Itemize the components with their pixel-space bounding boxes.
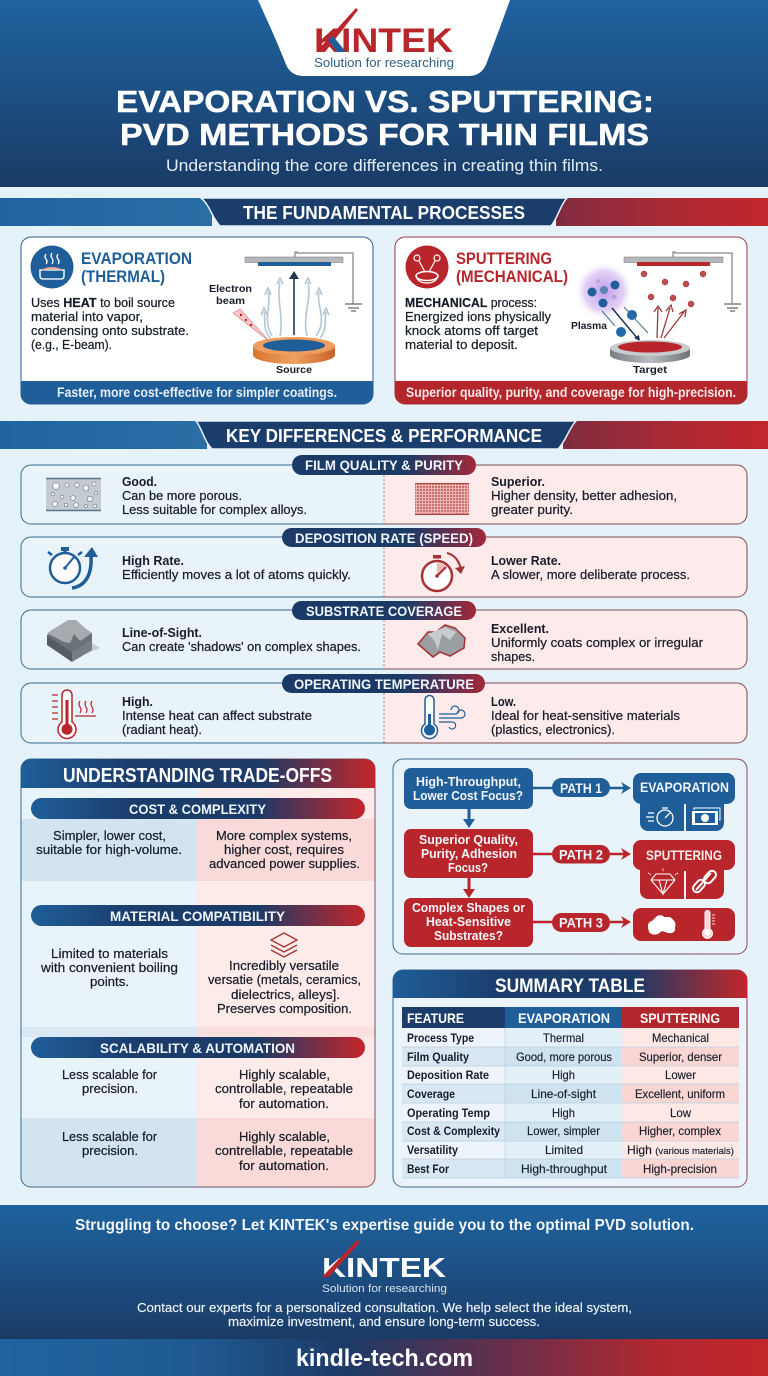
question: complex shapes: Complex Shapes or	[412, 901, 525, 915]
text: sputtering description: material to deposit.	[405, 337, 518, 352]
question: superior quality: Focus?	[448, 861, 488, 875]
text: sputtering scalability	[215, 1067, 353, 1111]
row: coverage: Coverage	[407, 1087, 455, 1101]
row: best for: High-throughput	[521, 1162, 608, 1176]
icon: thermometer	[702, 910, 715, 938]
row: versatility: Limited	[545, 1143, 583, 1157]
question: superior quality: Superior Quality,	[419, 833, 518, 847]
text: evaporation coverage	[122, 625, 361, 654]
row: operating temp: High	[552, 1106, 575, 1120]
section bar: the fundamental processes	[0, 198, 768, 226]
text: sputtering cost: More complex systems,	[216, 828, 352, 843]
text: evaporation materials	[40, 946, 178, 989]
text: sputtering film quality	[491, 474, 677, 517]
table	[402, 1007, 739, 1178]
title	[116, 84, 654, 152]
comparison row: deposition rate	[21, 528, 747, 597]
comparison row: operating temperature	[21, 674, 747, 743]
icon: dense film	[415, 483, 469, 515]
panel: summary table	[393, 970, 747, 1187]
icon: broken chain	[691, 869, 718, 894]
pill label: OPERATING TEMPERATURE	[294, 676, 474, 692]
section bar: key differences: KEY DIFFERENCES & PERFORMANCE	[226, 426, 542, 446]
text: sputtering materials: dielectrics, alleys].	[231, 987, 340, 1002]
row: process type: Mechanical	[652, 1031, 709, 1045]
row: best for: Best For	[407, 1162, 449, 1176]
sputtered atoms	[641, 271, 706, 307]
text: sputtering coverage: Uniformly coats complex or irregular	[491, 635, 704, 650]
row: coverage	[407, 1087, 725, 1101]
arrow: down to shapes	[463, 878, 475, 898]
pill label: SUBSTRATE COVERAGE	[306, 603, 462, 619]
callout: evaporation	[21, 381, 373, 404]
heading: sputtering	[456, 250, 568, 286]
text: sputtering coverage: shapes.	[491, 649, 535, 664]
icon: shadowed block	[47, 620, 100, 662]
row: film quality	[407, 1050, 722, 1064]
comparison row: film quality	[21, 455, 747, 524]
text: sputtering scalability: controllable, repeatable	[215, 1081, 353, 1096]
heading: summary table	[393, 970, 747, 998]
website bar	[0, 1339, 768, 1376]
text: sputtering coverage	[491, 621, 704, 664]
heading: sputtering: (MECHANICAL)	[456, 268, 568, 286]
text: evaporation cost	[36, 828, 182, 857]
heading: summary table: SUMMARY TABLE	[495, 976, 645, 997]
row: deposition rate: Lower	[665, 1068, 696, 1082]
text: evaporation scalability: Less scalable for	[62, 1067, 158, 1082]
row: process type: Thermal	[543, 1031, 584, 1045]
text: evaporation coverage: Can create 'shadows' on complex shapes.	[122, 639, 361, 654]
text: sputtering temperature	[491, 694, 680, 737]
text: evaporation description: Uses HEAT to boil source	[31, 295, 175, 310]
text: sputtering cost: advanced power supplies.	[209, 856, 360, 871]
text: sputtering film quality: greater purity.	[491, 502, 573, 517]
sub-heading: cost and complexity: COST & COMPLEXITY	[129, 801, 267, 817]
text: evaporation scalability repeat	[62, 1129, 158, 1158]
text: evaporation description	[31, 295, 189, 352]
row: deposition rate: Deposition Rate	[407, 1068, 489, 1082]
text: sputtering scalability repeat: Highly scalable,	[239, 1129, 330, 1144]
text: evaporation materials: Limited to materials	[51, 946, 169, 961]
text: sputtering description: knock atoms off target	[405, 323, 538, 338]
text: evaporation rate: High Rate.	[122, 553, 184, 568]
question: complex shapes: Substrates?	[434, 929, 503, 943]
result: evaporation: EVAPORATION	[640, 779, 729, 795]
logo tab: KINTEK	[314, 22, 453, 60]
text: sputtering coverage: Excellent.	[491, 621, 549, 636]
row: operating temp	[407, 1106, 691, 1120]
heading: evaporation	[81, 250, 192, 286]
row: cost and complexity: Cost & Complexity	[407, 1124, 500, 1138]
row: best for	[407, 1162, 717, 1176]
text: sputtering scalability repeat: contrellable, repeatable	[215, 1143, 353, 1158]
text: sputtering temperature: Ideal for heat-sensitive materials	[491, 708, 680, 723]
text: sputtering materials: versatie (metals, ceramics,	[208, 972, 361, 987]
heading: evaporation: (THERMAL)	[81, 268, 165, 286]
row: coverage: Line-of-sight	[531, 1087, 597, 1101]
heading: evaporation: EVAPORATION	[81, 250, 192, 268]
diagram: evaporation chamber	[209, 252, 362, 376]
subtitle: Understanding the core differences in creating thin films.	[166, 156, 603, 175]
question: high throughput: Lower Cost Focus?	[413, 789, 523, 803]
contact text	[137, 1300, 632, 1329]
row: versatility	[407, 1143, 734, 1157]
contact text: maximize investment, and ensure long-term success.	[228, 1314, 540, 1329]
logo tab	[258, 0, 510, 76]
row: coverage: Excellent, uniform	[635, 1087, 725, 1101]
text: evaporation scalability	[62, 1067, 158, 1096]
icon: porous film	[46, 478, 101, 511]
source crucible	[253, 337, 335, 364]
text: evaporation rate: Efficiently moves a lot of atoms quickly.	[122, 567, 351, 582]
text: sputtering description	[405, 295, 551, 352]
text: evaporation cost: Simpler, lower cost,	[53, 828, 166, 843]
diagram: sputtering chamber	[571, 252, 741, 376]
arrow: down to quality	[463, 809, 475, 828]
text: sputtering scalability repeat	[215, 1129, 353, 1173]
header	[0, 0, 768, 187]
pill label: FILM QUALITY & PURITY	[305, 457, 464, 473]
text: evaporation temperature	[122, 694, 312, 737]
pill label: DEPOSITION RATE (SPEED)	[295, 530, 473, 546]
section bar: the fundamental processes: THE FUNDAMENTAL PROCESSES	[243, 203, 525, 223]
text: evaporation scalability repeat: precision.	[82, 1143, 138, 1158]
text: evaporation film quality: Less suitable for complex alloys.	[122, 502, 307, 517]
icon: sputtering target	[406, 246, 448, 288]
text: sputtering description: MECHANICAL process:	[405, 295, 537, 310]
icon: banknotes	[692, 808, 720, 825]
text: evaporation description: condensing onto substrate.	[31, 323, 189, 338]
ions and arrows	[602, 307, 648, 341]
path 3 connector: PATH 3	[559, 914, 603, 930]
row: cost and complexity	[407, 1124, 721, 1138]
text: sputtering film quality: Superior.	[491, 474, 545, 489]
row: process type	[407, 1031, 709, 1045]
result: sputtering: SPUTTERING	[646, 847, 722, 863]
table header: SPUTTERING	[640, 1010, 720, 1026]
text: sputtering cost	[209, 828, 360, 871]
sub-heading: material compatibility	[31, 905, 365, 926]
question: superior quality: Purity, Adhesion	[421, 847, 517, 861]
contact text: Contact our experts for a personalized consultation. We help select the ideal system,	[137, 1300, 632, 1315]
text: sputtering description: Energized ions physically	[405, 309, 551, 324]
sub-heading: scalability and automation: SCALABILITY & AUTOMATION	[100, 1040, 295, 1056]
text: evaporation coverage: Line-of-Sight.	[122, 625, 202, 640]
callout: sputtering	[395, 381, 747, 404]
text: evaporation film quality: Can be more porous.	[122, 488, 242, 503]
comparison row: substrate coverage	[21, 601, 747, 669]
table header	[402, 1007, 739, 1028]
row: cost and complexity: Higher, complex	[639, 1124, 721, 1138]
target	[610, 340, 690, 363]
text: evaporation description: material into vapor,	[31, 309, 143, 324]
row: deposition rate: High	[552, 1068, 575, 1082]
labels: sputtering diagram	[571, 320, 668, 376]
labels: sputtering diagram: Target	[633, 364, 668, 376]
callout: evaporation: Faster, more cost-effective for simpler coatings.	[57, 385, 337, 400]
sub-heading: material compatibility: MATERIAL COMPATIBILITY	[110, 908, 286, 924]
row: cost and complexity: Lower, simpler	[527, 1124, 600, 1138]
text: sputtering film quality: Higher density, better adhesion,	[491, 488, 677, 503]
path 2 connector	[533, 845, 631, 864]
icon: diamond	[648, 868, 678, 894]
question: complex shapes	[404, 898, 533, 947]
section bar: key differences	[0, 421, 768, 449]
panel: understanding trade-offs	[21, 759, 375, 1187]
heading: trade-offs	[21, 759, 375, 788]
text: evaporation scalability repeat: Less scalable for	[62, 1129, 158, 1144]
panel: sputtering	[395, 237, 747, 404]
row: film quality: Film Quality	[407, 1050, 469, 1064]
text: evaporation scalability: precision.	[82, 1081, 138, 1096]
text: sputtering scalability: Highly scalable,	[239, 1067, 330, 1082]
path 1 connector: PATH 1	[560, 780, 602, 796]
icon: layers	[271, 933, 297, 957]
title: EVAPORATION VS. SPUTTERING:	[116, 84, 654, 119]
text: sputtering rate: Lower Rate.	[491, 553, 561, 568]
icon: coated block	[418, 625, 465, 657]
text: sputtering temperature: (plastics, electronics).	[491, 722, 615, 737]
row: versatility: Versatility	[407, 1143, 458, 1157]
labels: evaporation diagram: Source	[276, 364, 312, 376]
row: deposition rate	[407, 1068, 696, 1082]
title: PVD METHODS FOR THIN FILMS	[120, 117, 649, 152]
call to action: Struggling to choose? Let KINTEK's expertise guide you to the optimal PVD solution.	[75, 1217, 694, 1234]
row: operating temp: Low	[670, 1106, 691, 1120]
heading: sputtering: SPUTTERING	[456, 250, 552, 268]
electron beam	[233, 309, 270, 342]
text: evaporation temperature: High.	[122, 694, 153, 709]
text: sputtering materials	[208, 958, 361, 1016]
result: sputtering	[633, 840, 735, 899]
arrows: ejected atoms	[654, 305, 686, 338]
text: sputtering rate	[491, 553, 690, 582]
result: evaporation	[633, 773, 735, 831]
sub-heading: scalability and automation	[31, 1037, 365, 1058]
arrows: vapor	[261, 278, 329, 338]
text: sputtering scalability: for automation.	[239, 1096, 329, 1111]
text: sputtering materials: Preserves composition.	[217, 1001, 352, 1016]
text: sputtering temperature: Low.	[491, 694, 516, 709]
sub-heading: cost and complexity	[31, 798, 365, 819]
icon: slow stopwatch	[422, 553, 465, 591]
row: operating temp: Operating Temp	[407, 1106, 490, 1120]
table header: EVAPORATION	[518, 1010, 610, 1026]
heading: trade-offs: UNDERSTANDING TRADE-OFFS	[63, 765, 332, 787]
logo tab: Solution for researching	[314, 55, 454, 70]
footer	[0, 1205, 768, 1339]
text: evaporation film quality: Good.	[122, 474, 157, 489]
question: high throughput: High-Throughput,	[416, 775, 521, 789]
question: complex shapes: Heat-Sensitive	[426, 915, 511, 929]
text: sputtering rate: A slower, more deliberate process.	[491, 567, 690, 582]
website bar: kindle-tech.com	[296, 1345, 473, 1372]
path 3 connector	[533, 913, 631, 932]
row: versatility: High (various materials)	[627, 1143, 734, 1157]
text: evaporation temperature: Intense heat can affect substrate	[122, 708, 312, 723]
question: high throughput	[404, 768, 533, 809]
panel: decision flowchart	[393, 759, 747, 954]
text: evaporation rate	[122, 553, 351, 582]
row: best for: High-precision	[643, 1162, 717, 1176]
labels: evaporation diagram: Electron	[209, 283, 252, 295]
icon: cool thermometer	[422, 696, 465, 739]
text: sputtering cost: higher cost, requires	[224, 842, 345, 857]
icon: evaporation bowl	[30, 246, 74, 288]
footer logo	[322, 1240, 447, 1295]
labels: evaporation diagram	[209, 283, 312, 376]
text: evaporation materials: with convenient boiling	[40, 960, 178, 975]
footer logo: Solution for researching	[322, 1283, 447, 1295]
path 1 connector	[533, 778, 631, 797]
row: film quality: Superior, denser	[639, 1050, 722, 1064]
text: evaporation film quality	[122, 474, 307, 517]
labels: evaporation diagram: beam	[216, 295, 245, 307]
arrow: central vapor	[289, 271, 299, 335]
table header: FEATURE	[407, 1010, 464, 1026]
question: superior quality	[404, 829, 533, 878]
text: evaporation temperature: (radiant heat).	[122, 722, 202, 737]
text: sputtering materials: Incredibly versatile	[229, 958, 339, 973]
text: evaporation cost: suitable for high-volume.	[36, 842, 182, 857]
path 2 connector: PATH 2	[559, 846, 603, 862]
callout: sputtering: Superior quality, purity, and coverage for high-precision.	[406, 385, 736, 400]
row: film quality: Good, more porous	[516, 1050, 612, 1064]
footer logo: KINTEK	[322, 1252, 446, 1283]
plasma cloud	[576, 263, 632, 319]
text: evaporation description: (e.g., E-beam).	[31, 337, 112, 352]
icon: coated shape	[648, 915, 675, 935]
text: sputtering scalability repeat: for automation.	[239, 1158, 329, 1173]
icon: fast stopwatch	[48, 547, 98, 588]
panel: evaporation	[21, 237, 373, 404]
icon: hot thermometer	[52, 690, 96, 738]
icon: stopwatch	[646, 808, 673, 826]
result: complex shapes and low heat	[633, 908, 735, 941]
row: process type: Process Type	[407, 1031, 474, 1045]
labels: sputtering diagram: Plasma	[571, 320, 607, 332]
text: evaporation materials: points.	[90, 974, 129, 989]
